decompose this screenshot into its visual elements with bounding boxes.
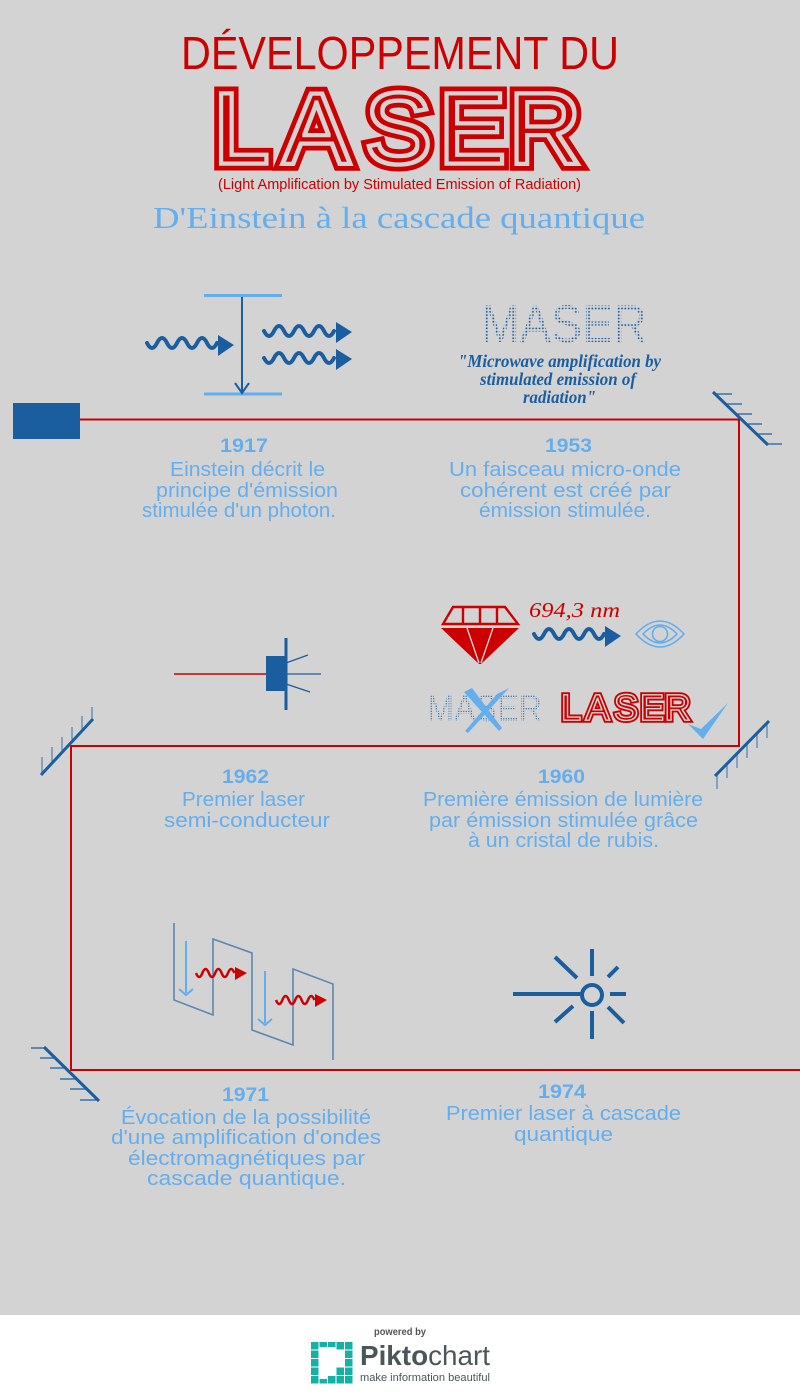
1971 text: électromagnétiques par	[128, 1147, 365, 1170]
1971 text: cascade quantique.	[147, 1167, 346, 1190]
small striped LASER: LASER	[561, 687, 690, 728]
title: striped LASER: LASER	[214, 73, 581, 185]
laser beam path	[71, 420, 800, 1070]
1962 text	[164, 767, 330, 832]
1917 text	[142, 436, 338, 522]
mirror: top right	[713, 392, 782, 445]
title: développement du: DÉVELOPPEMENT DU	[181, 27, 619, 79]
MASER definition: radiation"	[523, 387, 596, 407]
1971 text: Évocation de la possibilité	[121, 1106, 371, 1129]
acronym text: (Light Amplification by Stimulated Emission of Radiation)	[218, 176, 581, 193]
1960 text: à un cristal de rubis.	[468, 829, 659, 852]
icon: crossed-out MASER: MASER	[427, 688, 542, 729]
small striped LASER: LASER	[561, 687, 690, 728]
1974 text	[446, 1082, 681, 1146]
icon: check mark	[688, 703, 728, 739]
1962 text: semi-conducteur	[164, 809, 330, 832]
MASER definition: "Microwave amplification by	[458, 351, 662, 371]
mirror: middle right	[715, 721, 769, 789]
MASER definition	[458, 351, 662, 407]
1953 text: émission stimulée.	[479, 499, 651, 522]
laser source block	[13, 403, 80, 439]
1974 text: 1974	[538, 1082, 586, 1103]
1971 text: 1971	[222, 1085, 269, 1106]
icon: laser burst	[513, 949, 626, 1039]
title: striped LASER: LASER	[214, 73, 581, 185]
1960 text: Première émission de lumière	[423, 788, 703, 811]
1953 text	[449, 436, 681, 522]
icon: eye	[636, 621, 684, 647]
1960 text: par émission stimulée grâce	[429, 809, 698, 832]
icon: quantum cascade	[174, 923, 333, 1060]
1917 text: principe d'émission	[156, 479, 338, 502]
footer band	[0, 1315, 800, 1395]
footer: powered by: powered by	[374, 1327, 426, 1338]
1917 text: stimulée d'un photon.	[142, 499, 336, 522]
1917 text: Einstein décrit le	[170, 458, 325, 481]
subtitle: D'Einstein à la cascade quantique	[153, 200, 645, 235]
footer: Piktochart wordmark: Piktochart	[360, 1340, 490, 1371]
footer: tagline: make information beautiful	[360, 1372, 490, 1384]
1962 text: Premier laser	[182, 788, 305, 811]
wavelength label: 694,3 nm	[529, 598, 620, 622]
MASER definition: stimulated emission of	[479, 369, 638, 389]
small striped LASER: LASER	[561, 687, 690, 728]
1974 text: quantique	[514, 1123, 613, 1146]
1960 text: 1960	[538, 767, 585, 788]
1917 text: 1917	[220, 436, 268, 457]
1953 text: Un faisceau micro-onde	[449, 458, 681, 481]
title: striped LASER: LASER	[214, 73, 581, 185]
1971 text	[111, 1085, 381, 1190]
icon: ruby	[441, 607, 519, 664]
icon: dotted MASER: MASER	[481, 295, 647, 354]
1953 text: cohérent est créé par	[460, 479, 671, 502]
icon: red light wave arrow	[534, 626, 621, 647]
mirror: bottom left	[31, 1047, 99, 1101]
1962 text: 1962	[222, 767, 269, 788]
icon: stimulated emission	[147, 296, 352, 394]
1974 text: Premier laser à cascade	[446, 1102, 681, 1125]
footer: logo icon	[311, 1342, 352, 1384]
1953 text: 1953	[545, 436, 592, 457]
icon: semiconductor laser	[174, 638, 321, 710]
1971 text: d'une amplification d'ondes	[111, 1126, 381, 1149]
1960 text	[423, 767, 703, 852]
mirror: middle left	[41, 707, 93, 775]
